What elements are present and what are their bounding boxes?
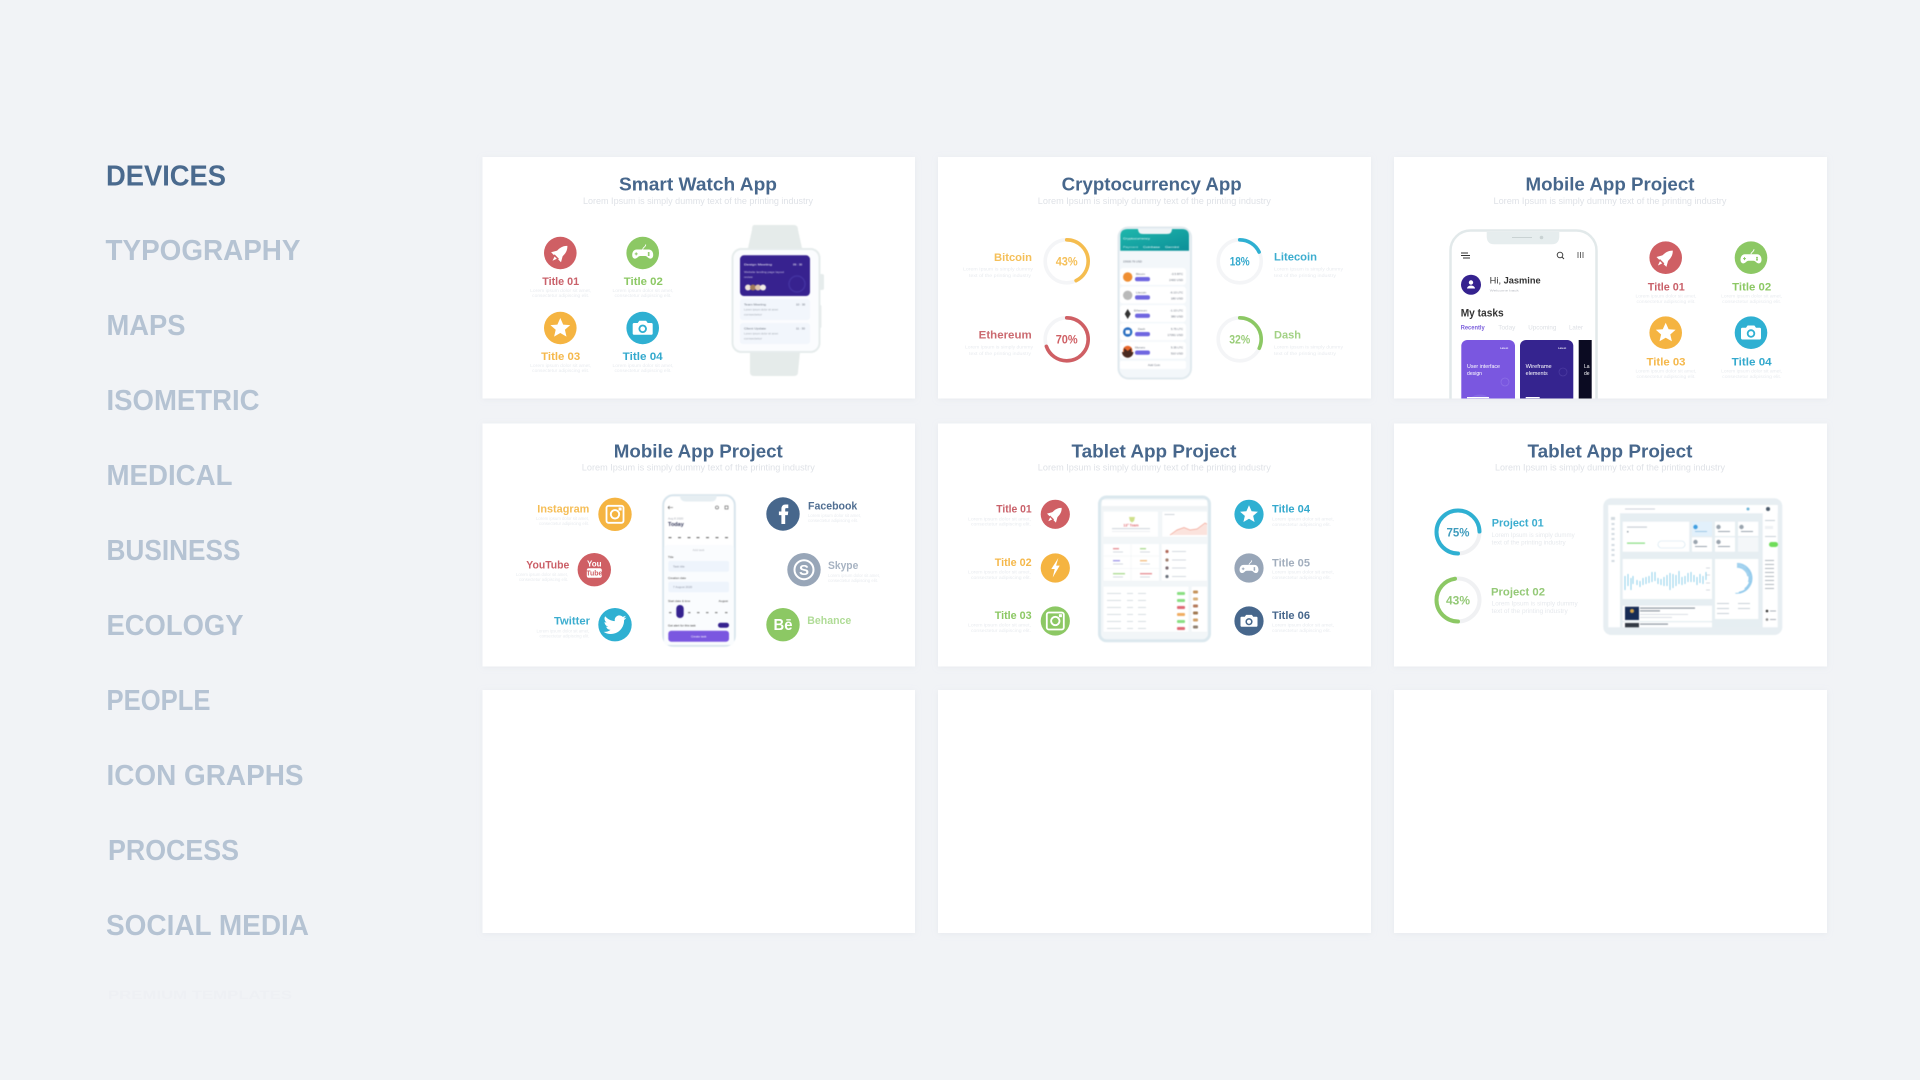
task card: wireframe: Wireframe (1526, 364, 1552, 370)
label: title 06: consectetur adipiscing elit. (1272, 628, 1331, 633)
label: title 03: consectetur adipiscing elit. (971, 628, 1031, 633)
ring: dash 32% (1218, 318, 1261, 361)
label: twitter (536, 616, 591, 638)
label: title 03: Lorem ipsum dolor sit amet, (1636, 368, 1696, 374)
task card: dark (1578, 340, 1592, 398)
coin row: bitcoin: Bitcoin (1136, 272, 1145, 276)
label: title 04 (1721, 356, 1782, 379)
stats grid (1104, 544, 1159, 581)
icon: rocket (1649, 241, 1682, 274)
label: litecoin: Litecoin (1274, 252, 1317, 264)
label: title 04: consectetur adipiscing elit. (1272, 522, 1331, 527)
subtitle: Lorem Ipsum is simply dummy text of the printing industry (1038, 463, 1271, 474)
nav item: medical: MEDICAL (106, 460, 232, 492)
label: dash: Lorem Ipsum is simply dummy (1274, 344, 1344, 350)
task form sheet: Creation date (668, 576, 686, 580)
coin row: ethereum: Ethereum (1134, 309, 1148, 313)
add coin button (1120, 361, 1186, 369)
create task button: Create task (691, 634, 707, 638)
customer list (1162, 544, 1207, 581)
icon: facebook (766, 497, 800, 531)
label: title 03 (530, 351, 591, 373)
panel: cryptocurrency app (938, 157, 1371, 398)
label: title 01 (968, 504, 1032, 526)
label: instagram (536, 503, 590, 526)
watch card: team meeting: Lorem ipsum dolor sit amet (744, 308, 778, 312)
label: title 04: Lorem ipsum dolor sit amet, (1721, 368, 1782, 374)
label: project 01: Lorem Ipsum is simply dummy (1492, 533, 1575, 539)
label: title 03: Title 03 (541, 351, 580, 363)
greeting: Hi, Jasmine (1490, 275, 1541, 285)
coin row: litecoin (1120, 286, 1186, 304)
analytics tablet mockup (1603, 498, 1782, 635)
label: title 02: Lorem ipsum dolor sit amet, (1721, 294, 1782, 298)
ring: ethereum 70%: 70% (1056, 334, 1078, 346)
label: skype (828, 560, 880, 583)
task form sheet: 7 August 2020 (673, 585, 693, 589)
coin row: bitcoin (1120, 268, 1186, 285)
label: instagram: Lorem ipsum dolor sit amet, (536, 516, 589, 521)
news feed (1623, 606, 1712, 627)
label: project 02: Lorem Ipsum is simply dummy (1492, 602, 1578, 608)
task tabs: Later (1569, 326, 1583, 332)
label: twitter: consectetur adipiscing elit. (540, 634, 590, 638)
calendar phone mockup: Today (668, 522, 685, 528)
coin row: litecoin: 180 USD (1171, 296, 1184, 300)
label: bitcoin (963, 252, 1034, 278)
calendar phone mockup: Aug 8 2020 (668, 516, 684, 520)
label: title 02 (612, 276, 674, 298)
label: title 03: consectetur adipiscing elit. (1636, 374, 1696, 379)
label: dash: text of the printing industry (1274, 351, 1337, 356)
smart watch mockup (732, 225, 824, 376)
label: project 01: text of the printing industry (1492, 541, 1566, 547)
label: title 05 (1272, 557, 1334, 580)
label: project 01 (1492, 518, 1575, 547)
icon: star (544, 312, 577, 344)
coin row: ethereum (1120, 305, 1186, 322)
icon: youtube (578, 553, 611, 586)
label: title 03: Title 03 (995, 610, 1032, 622)
coin row: monero: 510 USD (1171, 352, 1184, 356)
nav item: maps: MAPS (106, 310, 186, 342)
label: project 02: Project 02 (1491, 587, 1545, 599)
coin row: bitcoin: 2400 USD (1169, 278, 1184, 282)
nav item: icon graphs: ICON GRAPHS (106, 760, 304, 792)
left sidebar (1608, 505, 1620, 627)
greeting: Welcome back (1490, 288, 1519, 292)
watch card: design meeting: review (744, 275, 754, 279)
watch card: design meeting: Design Meeting (744, 262, 772, 266)
label: bitcoin: Bitcoin (994, 252, 1032, 264)
label: title 01: consectetur adipiscing elit. (532, 293, 589, 298)
label: title 04: Lorem ipsum dolor sit amet, (1272, 516, 1334, 522)
task card: dark: La (1584, 364, 1590, 370)
label: title 04: Title 04 (1732, 356, 1773, 368)
crypto phone mockup: Coinbase (1143, 245, 1160, 249)
watch card: client update: Client Update (744, 326, 766, 330)
coin row: litecoin: Litecoin (1136, 290, 1147, 294)
label: youtube: consectetur adipiscing elit. (519, 577, 568, 582)
icon: youtube: Tube (586, 571, 603, 578)
nav item: ecology: ECOLOGY (106, 610, 244, 642)
label: twitter: Twitter (554, 616, 591, 628)
crypto phone mockup: Payment (1123, 245, 1138, 249)
icon: behance (766, 608, 800, 641)
label: skype: Lorem ipsum dolor sit amet, (828, 573, 880, 578)
label: title 01: consectetur adipiscing elit. (1636, 299, 1696, 304)
heading: Tablet App Project (1072, 441, 1236, 461)
label: title 02: Lorem ipsum dolor sit amet, (612, 288, 674, 293)
label: litecoin: text of the printing industry (1274, 273, 1337, 278)
watch card: team meeting: consectetur (744, 312, 762, 316)
task card: wireframe (1520, 340, 1574, 398)
nav item: social media: SOCIAL MEDIA (106, 910, 309, 942)
watch card: team meeting (740, 299, 810, 320)
label: project 02: text of the printing industry (1492, 609, 1568, 615)
task card: wireframe: Latest (1558, 346, 1566, 350)
watch card: design meeting (740, 255, 810, 296)
add coin button: Add Coin (1148, 363, 1161, 367)
heading: Mobile App Project (614, 441, 783, 461)
label: behance: Behance (807, 615, 851, 627)
task form sheet: Start date & time (668, 599, 691, 603)
panel: empty slide 8 (938, 690, 1371, 933)
task card: user interface (1461, 340, 1515, 398)
icon: youtube: You (587, 560, 602, 569)
coin row: dash: 17091 USD (1167, 333, 1184, 337)
label: title 02: Title 02 (624, 276, 663, 288)
label: title 06 (1272, 610, 1334, 633)
icon: gamepad (626, 237, 659, 269)
icon: skype: S (799, 562, 809, 579)
greeting (1490, 277, 1540, 292)
panel: tablet app project (six titles) (938, 424, 1371, 666)
label: twitter: Lorem ipsum dolor sit amet, (536, 628, 590, 634)
icon: camera (1735, 316, 1767, 349)
crypto phone mockup: Cryptocurrency (1123, 236, 1151, 240)
label: facebook (808, 500, 861, 523)
label: title 03 (968, 610, 1032, 633)
label: title 01: Title 01 (1648, 281, 1685, 293)
coin row: monero (1120, 342, 1186, 359)
menu list (1192, 587, 1208, 632)
ring: ethereum 70% (1045, 318, 1088, 361)
label: youtube: YouTube (526, 559, 569, 571)
label: instagram: consectetur adipiscing elit. (539, 521, 589, 526)
nav item: people: PEOPLE (106, 685, 210, 717)
label: ethereum (965, 330, 1034, 356)
watch card: team meeting: Team Meeting (744, 302, 766, 306)
label: title 02 (968, 557, 1032, 580)
heading: Smart Watch App (619, 174, 777, 194)
crypto phone mockup: Gemini (1165, 245, 1179, 249)
label: dash: Dash (1274, 330, 1301, 342)
subtitle: Lorem Ipsum is simply dummy text of the printing industry (582, 463, 815, 474)
candlestick chart (1623, 559, 1712, 599)
tasks phone mockup (1449, 229, 1598, 398)
task tabs (1461, 326, 1583, 332)
label: facebook: consectetur adipiscing elit. (808, 518, 858, 523)
label: ethereum: Ethereum (979, 330, 1032, 342)
label: ethereum: text of the printing industry (969, 351, 1032, 356)
icon: instagram (598, 498, 632, 531)
label: project 02 (1491, 587, 1578, 615)
label: title 03: Lorem ipsum dolor sit amet, (968, 622, 1031, 628)
category navigation list (106, 160, 309, 1002)
panel: smart watch app (482, 157, 915, 398)
nav item: process: PROCESS (108, 835, 239, 867)
panel: mobile app project (tasks) (1394, 157, 1827, 398)
label: title 03 (1636, 356, 1696, 379)
heading: Cryptocurrency App (1062, 174, 1242, 194)
crypto phone mockup: 15600.79 USD (1123, 260, 1143, 264)
watch card: design meeting: Website landing page layout (744, 270, 784, 274)
label: title 05: Lorem ipsum dolor sit amet, (1272, 570, 1334, 574)
label: title 01 (1636, 281, 1696, 304)
label: title 04 (1272, 504, 1334, 527)
panel: empty slide 9 (1394, 690, 1827, 933)
coin row: dash: Dash (1138, 327, 1145, 331)
ring: project 02 43% (1436, 578, 1480, 622)
nav item: business: BUSINESS (106, 535, 240, 567)
label: title 05: consectetur adipiscing elit. (1272, 575, 1331, 580)
task form sheet: Add task (693, 548, 705, 552)
label: title 02: consectetur adipiscing elit. (971, 575, 1031, 580)
task card: user interface: design (1467, 371, 1482, 377)
task card: user interface: User interface (1467, 364, 1500, 370)
heading: Tablet App Project (1528, 441, 1692, 461)
label: title 02: consectetur adipiscing elit. (1722, 299, 1781, 304)
top bar (1608, 505, 1778, 513)
label: title 01: Title 01 (996, 504, 1032, 516)
ring: project 01 75% (1436, 510, 1480, 554)
icon: camera (1234, 606, 1264, 636)
label: facebook: Lorem ipsum dolor sit amet, (808, 513, 861, 518)
label: youtube (516, 559, 569, 582)
label: title 02: consectetur adipiscing elit. (614, 293, 672, 298)
watch card: client update: 11 : 30 (796, 326, 805, 330)
task tabs: Upcoming (1528, 326, 1556, 332)
panel: mobile app project (social) (482, 424, 915, 666)
label: project 01: Project 01 (1492, 518, 1544, 530)
icon: star (1234, 500, 1264, 529)
subtitle: Lorem Ipsum is simply dummy text of the printing industry (583, 196, 813, 207)
right side panel (1763, 505, 1778, 627)
ring: bitcoin 43% (1045, 240, 1088, 283)
area chart card (1162, 512, 1207, 537)
subtitle: Lorem Ipsum is simply dummy text of the printing industry (1495, 463, 1725, 474)
panel: empty slide 7 (482, 690, 915, 933)
watch card: design meeting: 09 : 30 (793, 262, 803, 266)
my tasks heading: My tasks (1461, 308, 1504, 320)
icon: instagram (1041, 606, 1070, 636)
nav item: devices (active): DEVICES (106, 160, 226, 192)
ring: litecoin 18% (1218, 240, 1261, 283)
coin row: dash (1120, 323, 1186, 340)
coin row: ethereum: 380 USD (1171, 315, 1184, 319)
task card: dark: de (1584, 371, 1590, 377)
calendar phone mockup (663, 495, 735, 646)
label: skype: Skype (828, 560, 858, 572)
coin row: monero: 5.35 LTC (1171, 346, 1184, 350)
label: title 02: Title 02 (995, 557, 1032, 569)
icon: rocket (544, 237, 577, 269)
task card: wireframe: elements (1526, 371, 1548, 377)
watch card: client update: consectetur (744, 336, 762, 340)
nav item: typography: TYPOGRAPHY (106, 235, 300, 267)
label: facebook: Facebook (808, 500, 858, 512)
ring: bitcoin 43%: 43% (1056, 256, 1078, 268)
label: title 04: consectetur adipiscing elit. (614, 368, 672, 373)
label: youtube: Lorem ipsum dolor sit amet, (516, 572, 568, 577)
label: title 01: Lorem ipsum dolor sit amet, (530, 288, 591, 293)
coin row: litecoin: -6.13 LTC (1170, 290, 1184, 294)
label: title 04: consectetur adipiscing elit. (1722, 374, 1781, 379)
label: title 03: Title 03 (1646, 356, 1686, 368)
heading: Mobile App Project (1526, 174, 1695, 194)
label: litecoin: Lorem Ipsum is simply dummy (1274, 266, 1344, 272)
label: title 01: consectetur adipiscing elit. (971, 522, 1031, 526)
subtitle: Lorem Ipsum is simply dummy text of the printing industry (1494, 196, 1727, 207)
icon: skype (787, 553, 821, 586)
label: title 02: Title 02 (1732, 281, 1771, 293)
watch card: team meeting: 10 : 30 (796, 302, 806, 306)
label: title 01: Lorem ipsum dolor sit amet, (1636, 294, 1696, 298)
icon: rocket (1041, 500, 1070, 529)
label: title 04: Lorem ipsum dolor sit amet, (612, 363, 674, 368)
coin row: dash: 5.75 LTC (1171, 327, 1184, 331)
icon: camera (626, 312, 659, 344)
label: title 06: Title 06 (1272, 610, 1310, 622)
icon: lightning bolt (1041, 553, 1070, 583)
task form sheet: August (719, 599, 728, 603)
ring: litecoin 18%: 18% (1230, 256, 1250, 268)
subtitle: Lorem Ipsum is simply dummy text of the printing industry (1038, 196, 1271, 207)
task form sheet: Task title (673, 564, 685, 568)
balance cards (1692, 522, 1758, 552)
avatar (1461, 275, 1481, 295)
label: bitcoin: Lorem Ipsum is simply dummy (963, 266, 1034, 272)
task form sheet: Title (668, 555, 674, 559)
coin row: monero: Monero (1135, 346, 1146, 350)
welcome card: 13° Team (1123, 524, 1139, 528)
ring: project 02 43%: 43% (1446, 595, 1470, 607)
crypto phone mockup (1118, 228, 1191, 378)
label: title 06: Lorem ipsum dolor sit amet, (1272, 622, 1334, 628)
task form sheet (664, 545, 734, 645)
nav item: faded entry: PREMIUM TEMPLATES (108, 988, 292, 1002)
label: title 01: Title 01 (542, 276, 579, 288)
panel: tablet app project (two rings) (1394, 424, 1827, 666)
ring: project 01 75%: 75% (1446, 527, 1470, 539)
label: title 01: Lorem ipsum dolor sit amet, (968, 516, 1031, 522)
label: litecoin (1274, 252, 1344, 278)
coin row: bitcoin: -3.5 BTC (1171, 272, 1184, 276)
label: title 04 (612, 351, 674, 373)
label: ethereum: Lorem Ipsum is simply dummy (965, 344, 1034, 350)
nav item: isometric: ISOMETRIC (106, 385, 260, 417)
label: dash (1274, 330, 1344, 356)
task tabs: Recently (1461, 326, 1485, 332)
overview card (1623, 522, 1689, 552)
icon: gamepad (1735, 241, 1767, 274)
watch card: client update: Lorem ipsum dolor sit amet (744, 332, 778, 336)
icon: twitter (598, 608, 632, 641)
label: title 03: consectetur adipiscing elit. (532, 368, 589, 373)
task form sheet: Get alert for this task (668, 624, 696, 628)
watch card: client update (740, 323, 810, 344)
label: skype: consectetur adipiscing elit. (828, 578, 878, 583)
label: title 01 (530, 276, 591, 298)
label: title 02: Lorem ipsum dolor sit amet, (968, 570, 1031, 574)
label: title 05: Title 05 (1272, 557, 1310, 569)
label: title 02 (1721, 281, 1782, 304)
orders table (1104, 587, 1188, 632)
label: bitcoin: text of the printing industry (969, 273, 1032, 278)
icon: behance: Bē (774, 617, 793, 634)
icon: gamepad (1234, 553, 1264, 583)
label: instagram: Instagram (537, 503, 590, 515)
ring: dash 32%: 32% (1229, 334, 1250, 346)
task card: user interface: Latest (1500, 346, 1508, 350)
label: title 03: Lorem ipsum dolor sit amet, (530, 363, 591, 368)
dashboard tablet mockup (1100, 497, 1210, 641)
coin row: ethereum: -1.13 LTC (1170, 309, 1184, 313)
circular progress card (1715, 559, 1758, 619)
icon: star (1649, 316, 1682, 349)
label: title 04: Title 04 (623, 351, 664, 363)
label: title 04: Title 04 (1272, 504, 1311, 516)
task tabs: Today (1498, 326, 1515, 332)
